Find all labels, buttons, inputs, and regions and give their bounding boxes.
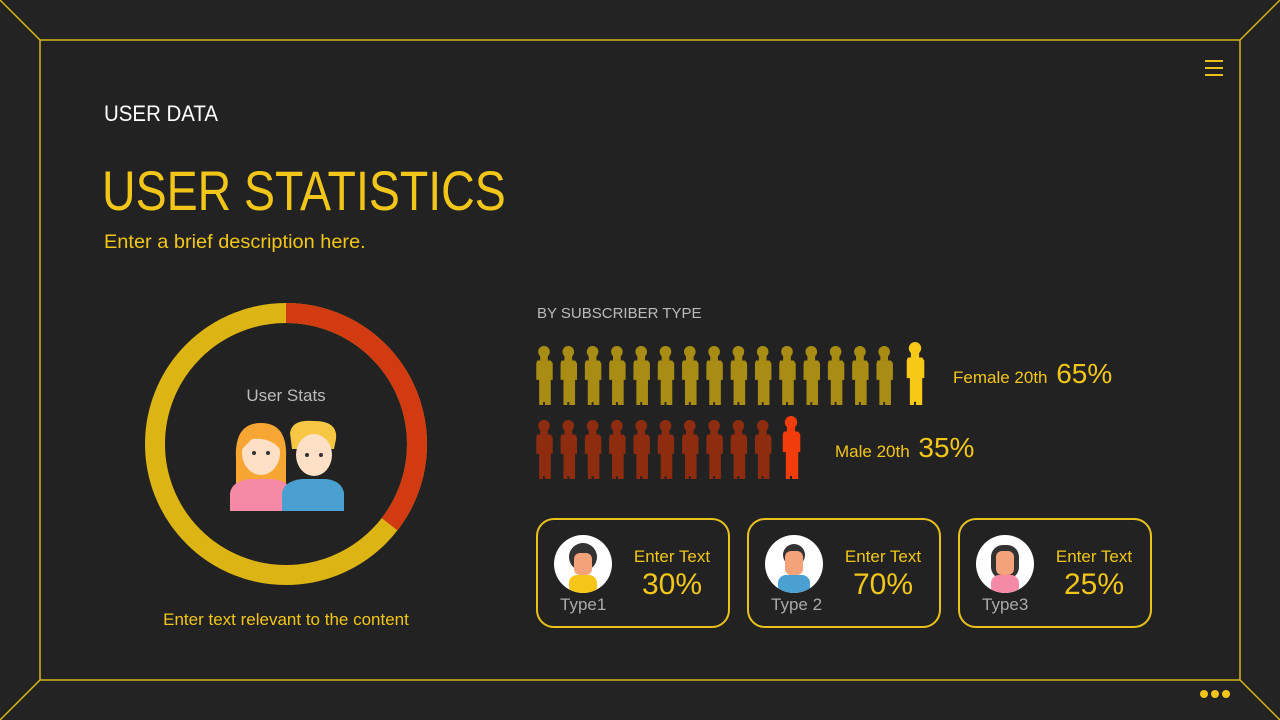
- pictogram: male: [536, 416, 800, 479]
- card: type3: 25%: [1064, 568, 1124, 601]
- icon: couple: [230, 420, 344, 511]
- card: type2: Enter Text: [845, 547, 921, 566]
- card: type2: [747, 518, 941, 628]
- card: type1: [536, 518, 730, 628]
- label: male: Male 20th 35%: [835, 432, 974, 463]
- card: type2: Type 2: [771, 595, 822, 614]
- avatar: [765, 535, 823, 593]
- title: USER STATISTICS: [102, 159, 506, 222]
- section heading: BY SUBSCRIBER TYPE: [537, 305, 702, 322]
- card: type1: 30%: [642, 568, 702, 601]
- icon: dots: [1200, 690, 1230, 698]
- icon: menu: [1205, 60, 1223, 76]
- donut chart: [145, 303, 427, 585]
- card: type3: Type3: [982, 595, 1028, 614]
- avatar: [976, 535, 1034, 593]
- chart label: User Stats: [246, 386, 326, 405]
- avatar: [554, 535, 612, 593]
- label: female: Female 20th 65%: [953, 358, 1112, 389]
- card: type3: [958, 518, 1152, 628]
- card: type1: Enter Text: [634, 547, 710, 566]
- description: Enter a brief description here.: [104, 232, 366, 253]
- pictogram: female: [536, 342, 924, 405]
- card: type3: Enter Text: [1056, 547, 1132, 566]
- subtitle label: USER DATA: [104, 101, 218, 126]
- caption: Enter text relevant to the content: [163, 610, 409, 629]
- card: type1: Type1: [560, 595, 606, 614]
- card: type2: 70%: [853, 568, 913, 601]
